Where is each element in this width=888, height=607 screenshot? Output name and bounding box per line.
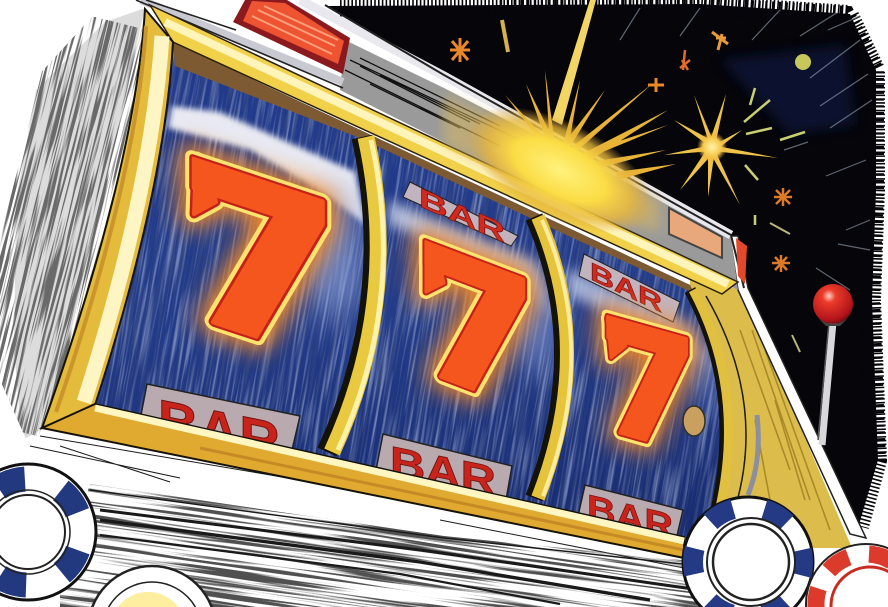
gold reel divider one xyxy=(327,137,383,452)
glowing seven three: 7 xyxy=(598,282,698,492)
glowing seven one: 7 xyxy=(178,110,342,416)
BAR plate reel two top xyxy=(403,181,518,249)
BAR plate reel three top: BAR xyxy=(590,256,662,319)
reel 1 xyxy=(140,106,366,474)
reel 3 xyxy=(566,254,719,548)
icon: red chip right xyxy=(805,543,888,607)
panel: black night sky with fringed edge xyxy=(328,3,880,528)
glowing seven two: 7 xyxy=(414,203,538,457)
icon: bottom cream chip xyxy=(91,564,213,607)
glowing seven three: 7 xyxy=(598,282,698,492)
BAR plate reel two bottom xyxy=(376,433,513,496)
glowing seven two: 7 xyxy=(414,203,538,457)
icon: red top lamp xyxy=(233,0,350,74)
gold reel divider two xyxy=(534,217,571,498)
shadow under top rail xyxy=(174,43,692,291)
panel: bottom hatched machine base xyxy=(30,436,699,607)
glowing seven two: 7 xyxy=(414,203,538,457)
BAR plate reel one: BAR xyxy=(158,388,280,474)
lit casing window xyxy=(669,208,722,258)
glowing seven one: 7 xyxy=(178,110,342,416)
icon: navy chip left xyxy=(0,462,98,602)
BAR plate reel three bottom xyxy=(578,484,684,535)
BAR plate reel two top: BAR xyxy=(419,181,505,249)
icon: navy chip right xyxy=(682,496,814,607)
reel pin xyxy=(683,406,705,436)
panel: gold side wedge xyxy=(690,278,852,548)
starburst glow on casing xyxy=(444,0,747,284)
BAR plate reel one xyxy=(140,383,301,448)
top rail xyxy=(150,5,738,294)
BAR plate reel three top xyxy=(579,254,680,322)
glowing seven three: 7 xyxy=(598,282,698,492)
panel: grey hatched machine side xyxy=(0,8,144,438)
icon: lever xyxy=(813,284,853,445)
glowing seven one: 7 xyxy=(178,110,342,416)
panel: white diagonal trim xyxy=(730,236,866,538)
panel: reels window xyxy=(96,43,720,540)
icon: large firework star xyxy=(664,88,805,225)
left rail xyxy=(42,9,173,428)
glowing seven one: 7 xyxy=(178,110,342,416)
panel: top casing xyxy=(136,0,744,290)
reel 2 xyxy=(376,181,558,505)
bottom rail xyxy=(42,404,684,558)
red side lamp xyxy=(736,238,747,284)
gold reel divider three xyxy=(690,290,746,535)
BAR plate reel three bottom: BAR xyxy=(587,486,673,548)
glowing seven three: 7 xyxy=(598,282,698,492)
glowing seven two: 7 xyxy=(414,203,538,457)
gold frame xyxy=(42,5,738,558)
BAR plate reel two bottom: BAR xyxy=(390,437,496,505)
icon: small firework sparks xyxy=(450,20,811,352)
